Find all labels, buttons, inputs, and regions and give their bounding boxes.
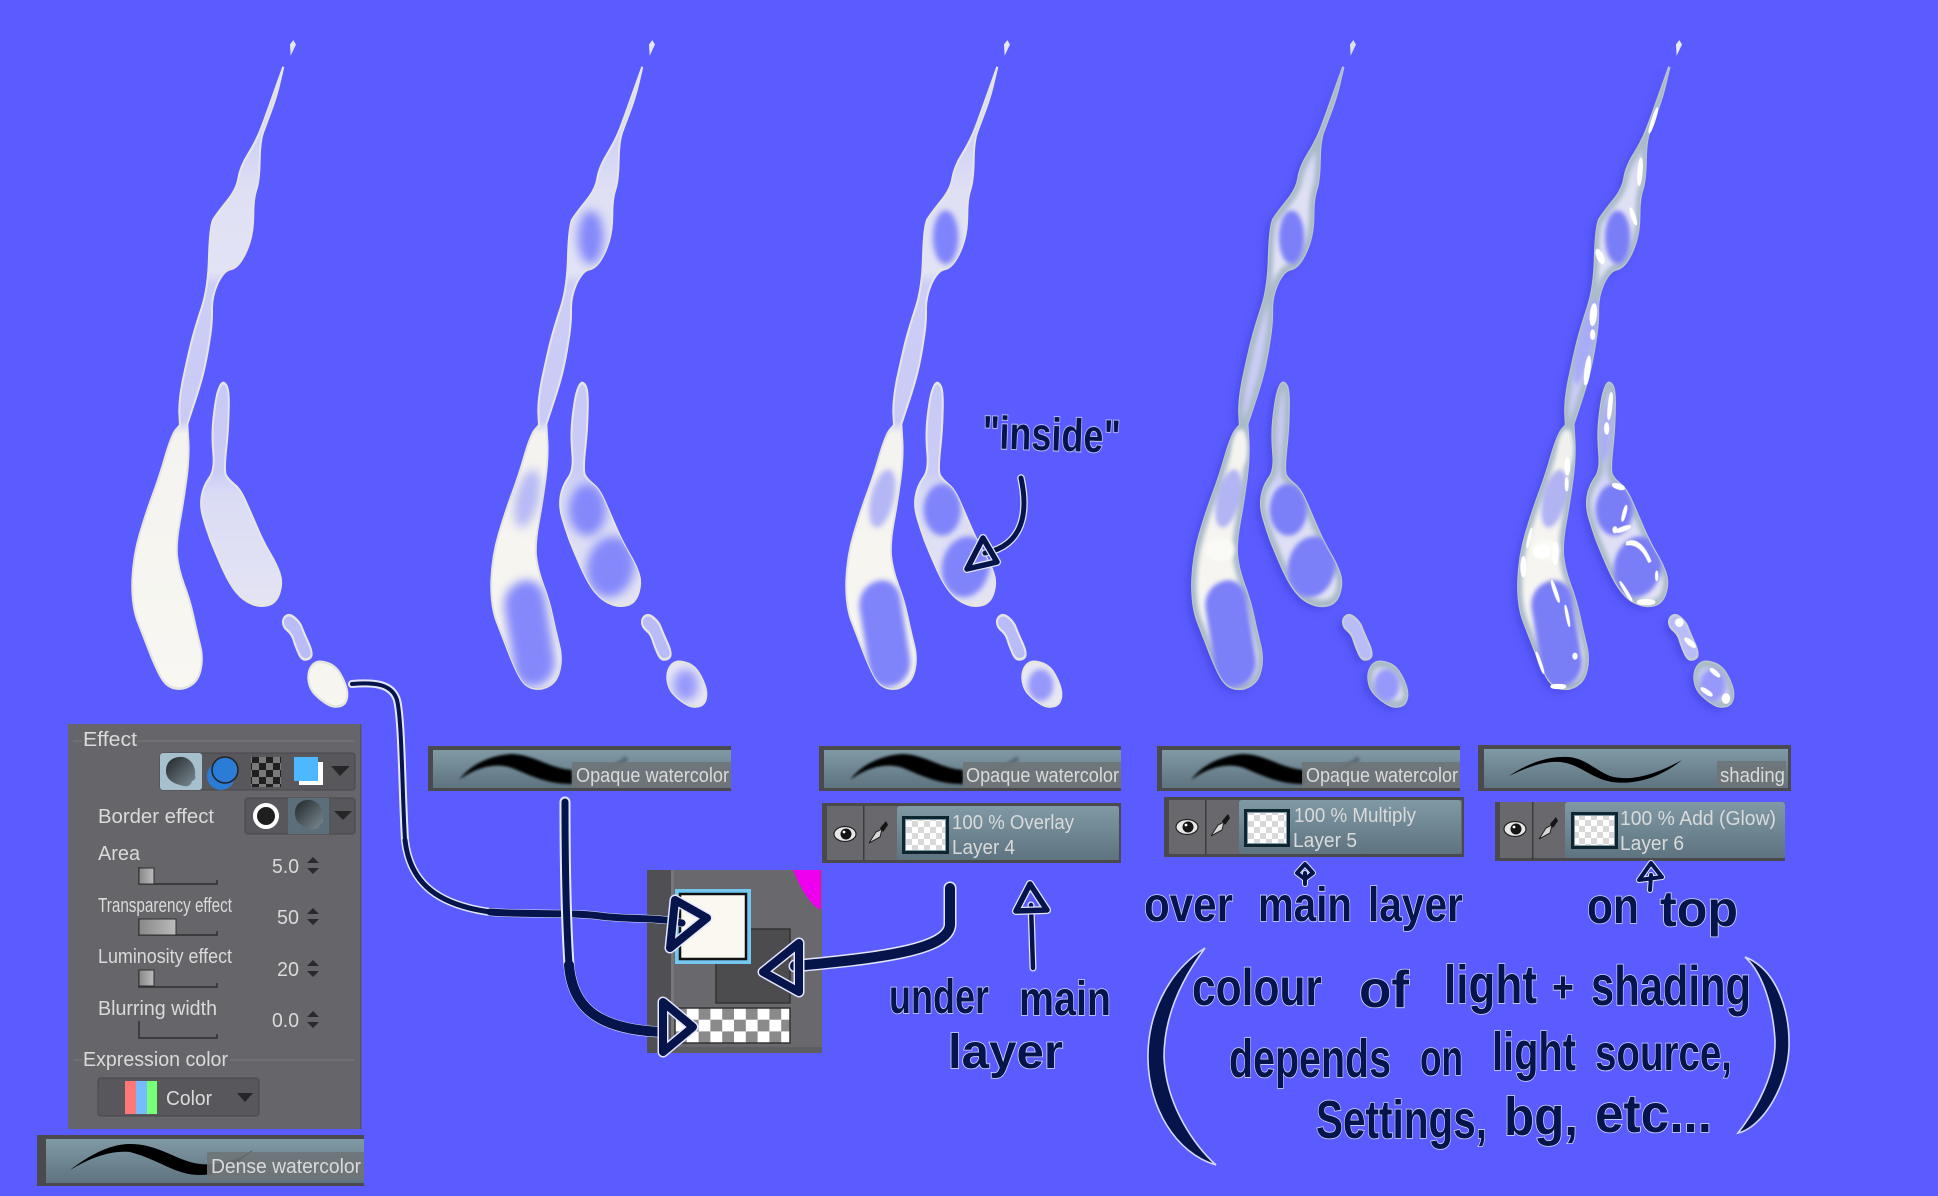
annotation: inside: "inside" <box>982 406 1121 463</box>
brush tab: Opaque watercolor 3: Opaque watercolor <box>1306 765 1458 787</box>
annotation: colour note in brackets: etc... <box>1595 1084 1712 1144</box>
annotation: colour note in brackets: source, <box>1595 1025 1732 1081</box>
setting: Luminosity effect: Luminosity effect <box>98 946 232 968</box>
brush tab: Opaque watercolor 2 <box>819 746 1121 791</box>
setting: Blurring width: 0.0 <box>272 1010 299 1032</box>
droplet stage 5: glow highlights on top <box>1513 40 1733 710</box>
annotation: colour note in brackets: Settings, <box>1316 1090 1487 1150</box>
setting: Blurring width <box>98 998 319 1038</box>
brush tab: shading <box>1478 745 1791 791</box>
arrow: layer to sub colour <box>763 888 950 992</box>
expression colour dropdown: Color <box>166 1088 212 1110</box>
arrow: up to layer 4 <box>1016 884 1047 968</box>
heading: Expression color: Expression color <box>83 1049 228 1071</box>
setting: Transparency effect: 50 <box>277 907 299 929</box>
arrow: inside pointer <box>967 478 1024 569</box>
annotation: under main layer: main <box>1019 973 1111 1026</box>
annotation: over main layer <box>1144 879 1463 932</box>
setting: Luminosity effect <box>98 946 319 987</box>
arrow: droplet colour to main colour <box>352 683 707 948</box>
arrow: up to layer 5 <box>1297 864 1313 884</box>
setting: Transparency effect <box>98 895 319 935</box>
arrow: brush to transparent colour <box>565 802 693 1052</box>
annotation: colour note in brackets: of <box>1359 961 1410 1019</box>
arrow: up to layer 6 <box>1639 863 1662 890</box>
annotation: colour note in brackets: bg, <box>1504 1087 1578 1147</box>
annotation: on top: top <box>1660 881 1738 937</box>
colour palette panel <box>647 870 822 1053</box>
label: Border effect: Border effect <box>98 806 214 828</box>
annotation: on top: on <box>1587 878 1639 934</box>
setting: Luminosity effect: 20 <box>277 959 299 981</box>
layer row: Layer 4 overlay: Layer 4 <box>952 837 1015 859</box>
layer row: Layer 6 add glow <box>1495 802 1785 861</box>
border effect toggle <box>245 798 355 834</box>
setting: Area: 5.0 <box>272 856 299 878</box>
heading: Effect: Effect <box>83 729 137 751</box>
annotation: colour note in brackets: depends <box>1229 1029 1391 1089</box>
annotation: colour note in brackets: colour <box>1192 959 1322 1017</box>
white highlights <box>1521 107 1730 703</box>
annotation: under main layer: layer <box>948 1026 1063 1079</box>
brush tab: Opaque watercolor 1 <box>428 746 731 791</box>
brush tab: Opaque watercolor 3 <box>1157 746 1460 791</box>
annotation: colour note in brackets: on <box>1420 1030 1463 1086</box>
expression colour dropdown <box>98 1078 259 1116</box>
annotation: over main layer: layer <box>1368 879 1463 932</box>
annotation: colour note in brackets: light <box>1444 955 1537 1015</box>
setting: Area <box>98 843 319 884</box>
droplet stage 1: base colour <box>132 40 347 706</box>
brush tab: Dense watercolor: Dense watercolor <box>211 1156 361 1178</box>
droplet stage 4: multiply shadow <box>1187 40 1407 710</box>
setting: Area: Area <box>98 843 141 865</box>
annotation: over main layer: over <box>1144 879 1233 932</box>
annotation: over main layer: main <box>1258 879 1352 932</box>
panel: effect settings <box>68 724 362 1129</box>
annotation: on top <box>1587 878 1738 937</box>
brush tab: shading: shading <box>1720 765 1785 787</box>
layer row: Layer 4 overlay: 100 % Overlay <box>952 812 1074 834</box>
setting: Blurring width: Blurring width <box>98 998 217 1020</box>
annotation: under main layer <box>889 971 1111 1079</box>
layer row: Layer 5 multiply <box>1164 797 1464 857</box>
layer row: Layer 6 add glow: Layer 6 <box>1620 833 1684 855</box>
annotation: colour note in brackets: shading <box>1591 954 1751 1017</box>
layer row: Layer 4 overlay <box>822 803 1121 863</box>
annotation: colour note in brackets: + <box>1552 963 1574 1012</box>
annotation: colour note in brackets: light <box>1492 1022 1576 1082</box>
droplet stage 2: opaque watercolor inside <box>491 40 706 706</box>
annotation: under main layer: under <box>889 971 989 1024</box>
effect toolbar icons <box>160 753 355 790</box>
layer row: Layer 5 multiply: Layer 5 <box>1293 830 1357 852</box>
droplet stage 3: overlay layer <box>846 40 1061 706</box>
brush tab: Opaque watercolor 2: Opaque watercolor <box>966 765 1119 787</box>
setting: Transparency effect: Transparency effect <box>98 895 232 917</box>
layer row: Layer 5 multiply: 100 % Multiply <box>1294 805 1416 827</box>
layer row: Layer 6 add glow: 100 % Add (Glow) <box>1620 808 1776 830</box>
brush tab: Dense watercolor <box>37 1135 364 1186</box>
brush tab: Opaque watercolor 1: Opaque watercolor <box>576 765 729 787</box>
annotation: colour note in brackets <box>1148 948 1789 1165</box>
